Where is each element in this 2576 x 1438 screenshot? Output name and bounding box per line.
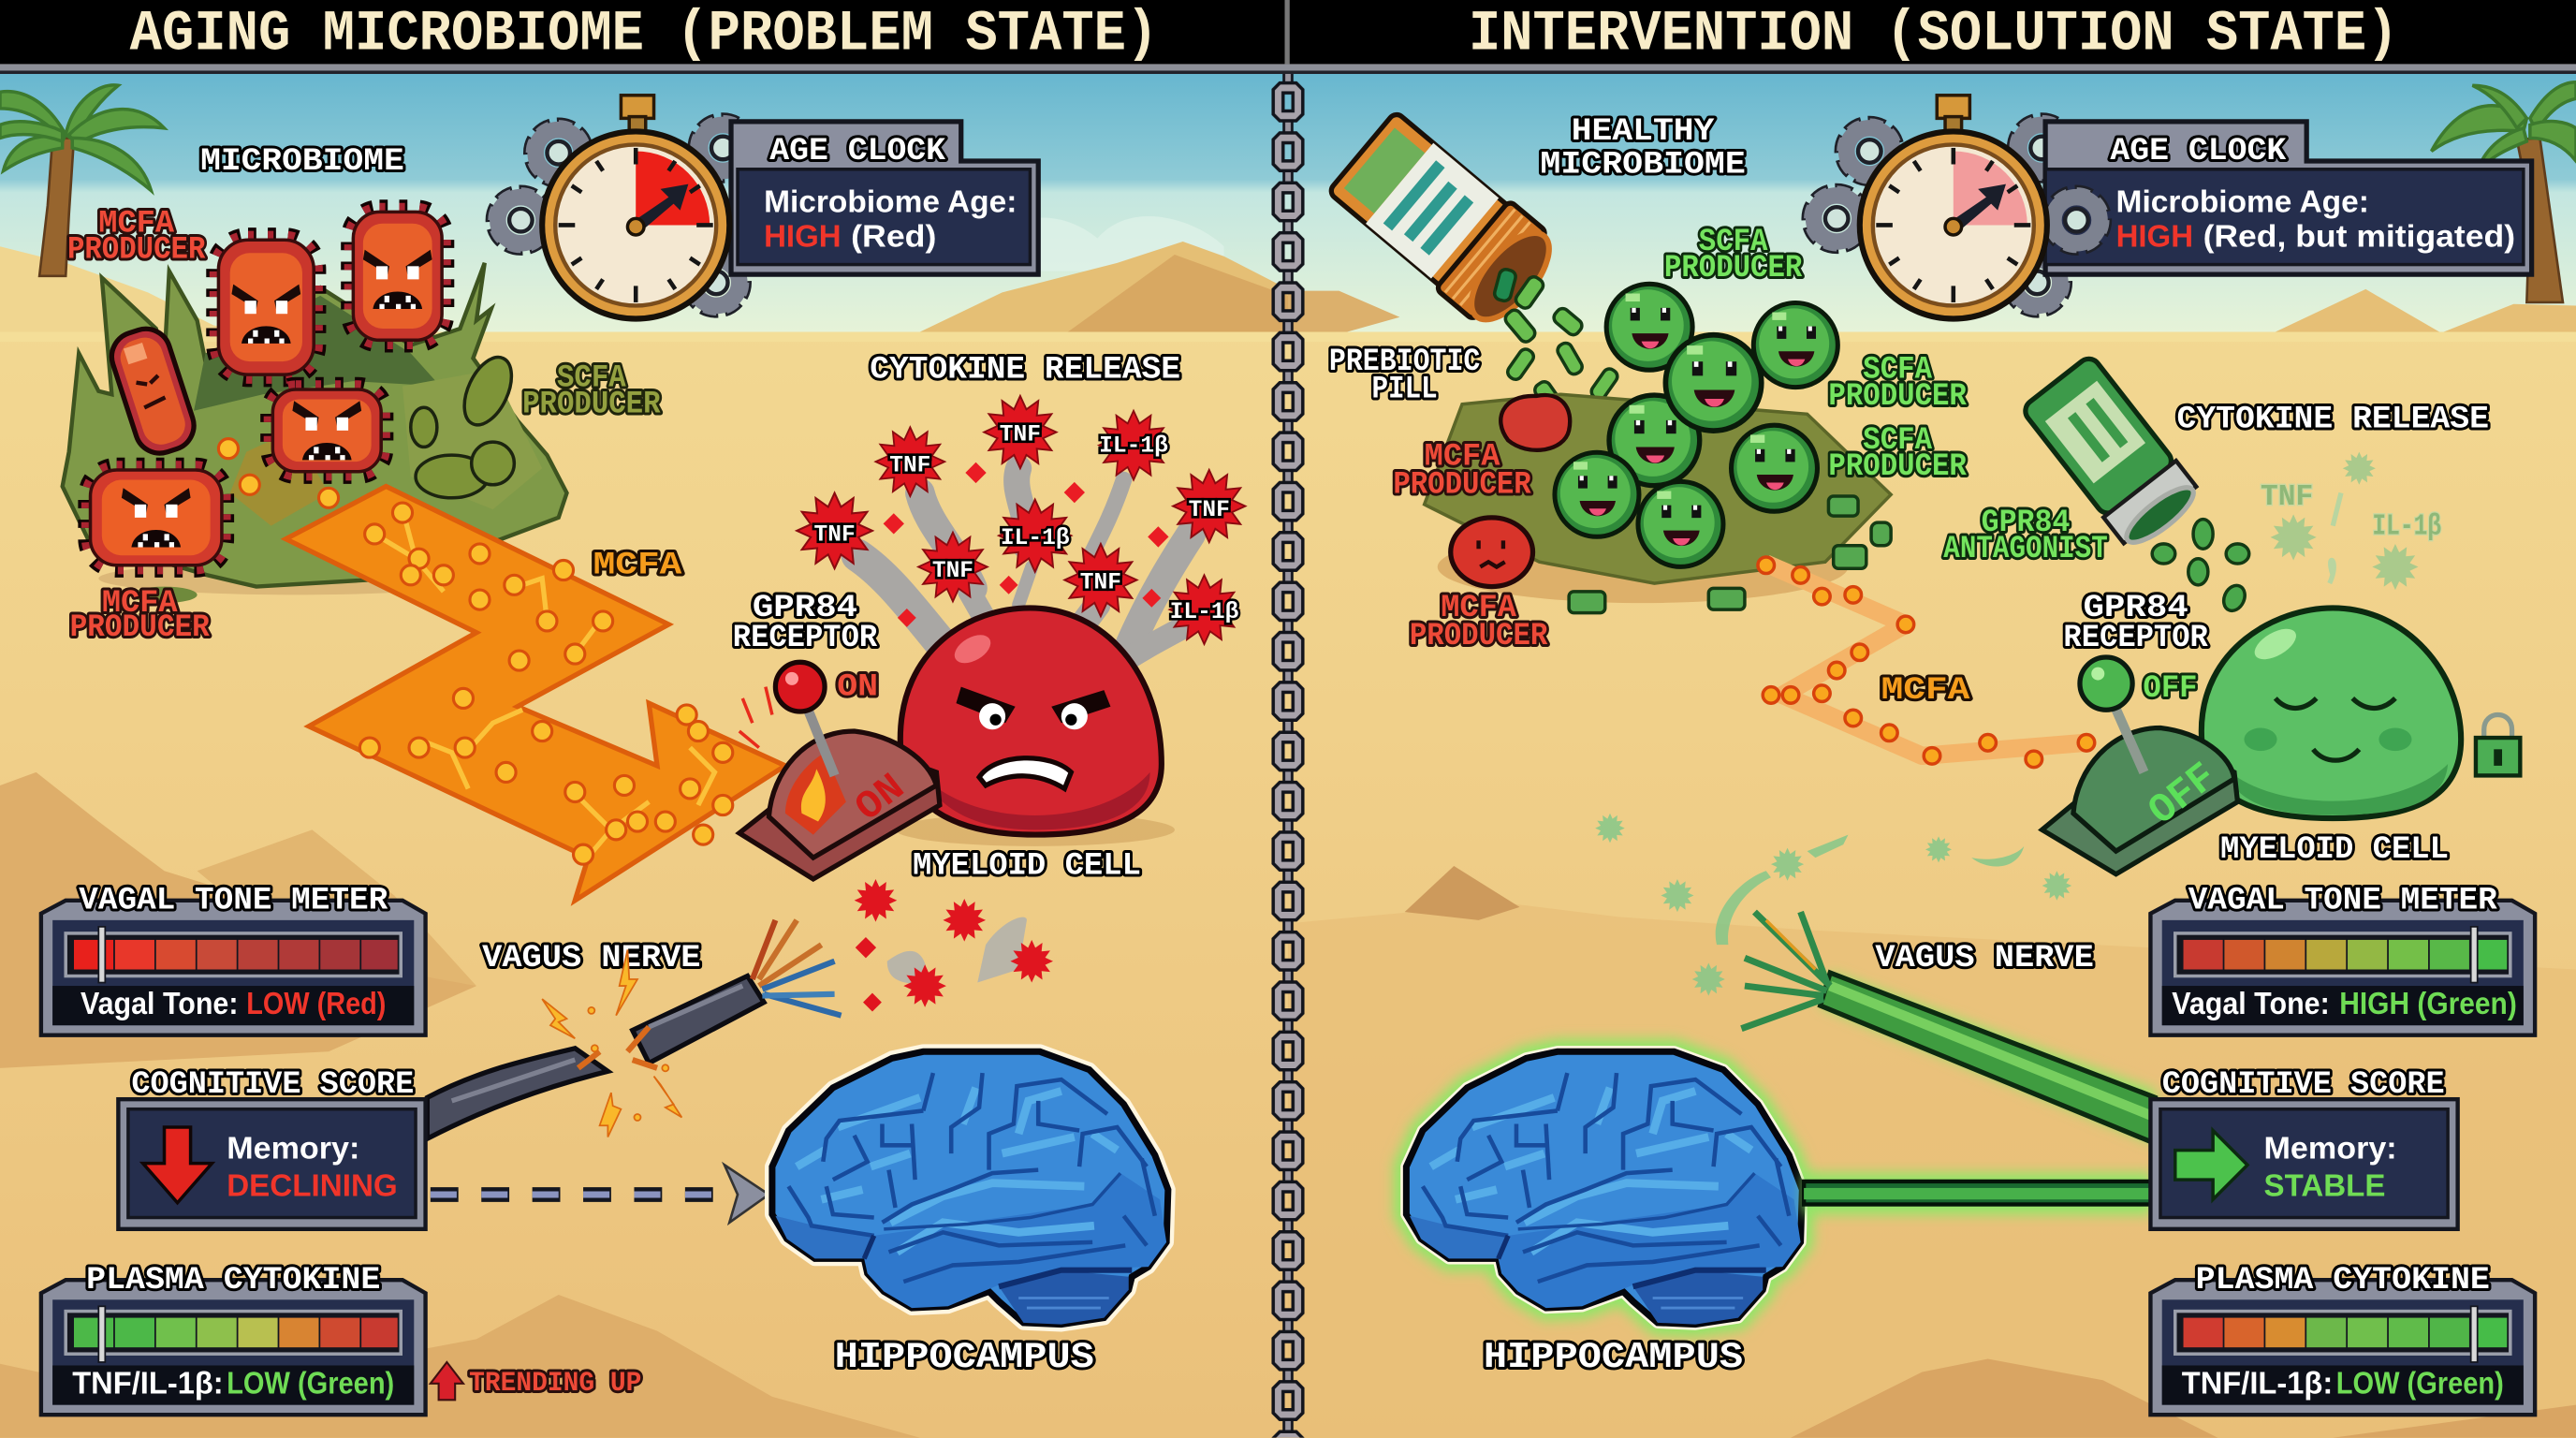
age clock left bbox=[494, 95, 1038, 318]
label: mcfa producer a bbox=[1393, 440, 1531, 504]
cytokine labels: TNF bbox=[889, 454, 930, 479]
panel: plasma cytokine left: PLASMA CYTOKINE bbox=[86, 1263, 380, 1299]
faded cytokines: TNF bbox=[2261, 481, 2313, 514]
label: scfa producer b bbox=[1828, 353, 1967, 415]
panel: age clock readout: Microbiome Age: bbox=[2116, 184, 2369, 219]
healthy connection to hippocampus bbox=[1804, 1173, 2152, 1214]
antagonist pills bbox=[2152, 520, 2249, 614]
panel: vagal tone meter left bbox=[41, 884, 426, 1035]
myeloid cell angry bbox=[896, 608, 1175, 846]
label: healthy microbiome: HEALTHY bbox=[1572, 114, 1715, 150]
trending up indicator bbox=[431, 1362, 641, 1400]
faded green particles bbox=[1595, 814, 2071, 996]
panel: vagal tone meter left: VAGAL TONE METER bbox=[79, 884, 388, 919]
panel: plasma cytokine right: LOW (Green) bbox=[2336, 1366, 2504, 1401]
red mcfa microbes reduced bbox=[1451, 395, 1570, 587]
healthy vagus nerve bbox=[1741, 912, 2156, 1144]
cytokine labels: IL-1β bbox=[1099, 434, 1168, 460]
label: scfa producer c: PRODUCER bbox=[1828, 449, 1967, 485]
label: off: OFF bbox=[2144, 671, 2197, 707]
switch: off lever bbox=[2042, 657, 2237, 874]
panel: plasma cytokine right bbox=[2150, 1263, 2535, 1415]
panel: plasma cytokine right: PLASMA CYTOKINE bbox=[2196, 1263, 2490, 1299]
label: on: ON bbox=[837, 669, 878, 705]
panel: cognitive score right bbox=[2150, 1067, 2458, 1229]
label: cytokine release right: CYTOKINE RELEASE bbox=[2177, 402, 2489, 437]
trending up indicator: TRENDING UP bbox=[469, 1367, 641, 1399]
cytokine labels: TNF bbox=[1080, 570, 1121, 595]
label: scfa producer b: SCFA bbox=[1863, 353, 1932, 389]
panel: age clock readout: (Red) bbox=[851, 219, 936, 254]
panel: vagal tone meter right: HIGH (Green) bbox=[2339, 987, 2517, 1021]
cytokine labels: IL-1β bbox=[1170, 600, 1239, 625]
label: mcfa producer b: MCFA bbox=[1441, 591, 1516, 626]
switch: on lever: ON bbox=[847, 765, 914, 831]
small red particles bbox=[884, 462, 1169, 627]
reduced mcfa trail bbox=[1758, 557, 2095, 768]
panel: cognitive score left: Memory: bbox=[227, 1131, 359, 1166]
panel: plasma cytokine right: TNF/IL-1β: bbox=[2182, 1366, 2333, 1401]
label: gpr84 antagonist: ANTAGONIST bbox=[1943, 532, 2108, 567]
panel: age clock readout bbox=[2045, 122, 2532, 274]
cytokine bursts bbox=[797, 396, 1245, 644]
label: scfa producer a bbox=[1664, 225, 1803, 286]
panel: vagal tone meter left: LOW (Red) bbox=[246, 987, 386, 1021]
label: scfa producer: SCFA bbox=[557, 360, 626, 396]
age clock right bbox=[1810, 95, 2532, 318]
label: prebiotic pill: PILL bbox=[1372, 373, 1438, 408]
title: solution state: INTERVENTION (SOLUTION STATE) bbox=[1469, 3, 2398, 67]
label: healthy microbiome: MICROBIOME bbox=[1540, 147, 1746, 183]
faded cytokines bbox=[2261, 452, 2441, 590]
chain divider bbox=[1271, 74, 1305, 1438]
title: problem state: AGING MICROBIOME (PROBLEM STATE) bbox=[130, 3, 1158, 67]
faded cytokines: IL-1β bbox=[2372, 510, 2441, 543]
icon: green right arrow bbox=[2175, 1131, 2247, 1199]
label: hippocampus left: HIPPOCAMPUS bbox=[835, 1337, 1094, 1378]
panel: vagal tone meter right: VAGAL TONE METER bbox=[2188, 884, 2497, 919]
icon: gears bbox=[494, 122, 749, 309]
panel: age clock readout: HIGH bbox=[2116, 219, 2193, 254]
panel: cognitive score right: STABLE bbox=[2264, 1169, 2385, 1204]
switch: off lever: OFF bbox=[2140, 755, 2226, 836]
severed vagus nerve bbox=[427, 920, 842, 1138]
cytokine labels: TNF bbox=[813, 522, 856, 548]
label: mcfa producer top bbox=[67, 206, 206, 269]
icon: stopwatch clock bbox=[1860, 95, 2047, 318]
label: mcfa producer b bbox=[1410, 591, 1548, 654]
icon: lock bbox=[2476, 714, 2520, 775]
label: hippocampus right: HIPPOCAMPUS bbox=[1484, 1337, 1743, 1378]
label: scfa producer bbox=[522, 360, 661, 423]
healthy biofilm mound bbox=[1425, 394, 1891, 613]
label: mcfa producer a: PRODUCER bbox=[1393, 468, 1531, 504]
label: gpr84 receptor bbox=[733, 591, 878, 656]
panel: intervention solution state bbox=[1325, 82, 2576, 1415]
label: scfa producer c bbox=[1828, 423, 1967, 485]
label: gpr84 receptor right: GPR84 bbox=[2083, 591, 2188, 626]
icon: gpr84 antagonist bottle bbox=[2020, 353, 2204, 553]
meter segments bbox=[74, 940, 398, 970]
label: scfa producer: PRODUCER bbox=[522, 388, 661, 423]
switch: on lever bbox=[739, 662, 940, 879]
panel: plasma cytokine left: LOW (Green) bbox=[227, 1366, 394, 1401]
sparks bbox=[542, 949, 681, 1137]
microbiome biofilm mound bbox=[63, 263, 567, 603]
panel: vagal tone meter right: Vagal Tone: bbox=[2172, 987, 2330, 1021]
arrow: dashed signal to hippocampus bbox=[431, 1165, 768, 1223]
label: scfa producer a: SCFA bbox=[1699, 225, 1768, 260]
icon: gears bbox=[1810, 122, 2069, 309]
icon: palm tree left bbox=[0, 85, 165, 276]
label: vagus nerve right: VAGUS NERVE bbox=[1875, 941, 2094, 976]
label: mcfa producer bottom: PRODUCER bbox=[70, 610, 210, 646]
panel: cognitive score right: Memory: bbox=[2264, 1131, 2397, 1166]
panel: cognitive score right: COGNITIVE SCORE bbox=[2162, 1067, 2445, 1103]
brain right hippocampus bbox=[1406, 1051, 1802, 1325]
label: gpr84 antagonist bbox=[1943, 506, 2108, 567]
scfa olive microbes bbox=[411, 350, 521, 498]
brain left hippocampus bbox=[772, 1051, 1168, 1325]
icon: palm tree right bbox=[2432, 82, 2576, 302]
cytokine labels: IL-1β bbox=[1001, 526, 1070, 551]
cytokine labels: TNF bbox=[1000, 422, 1041, 448]
label: myeloid cell: MYELOID CELL bbox=[913, 849, 1141, 885]
label: gpr84 antagonist: GPR84 bbox=[1982, 506, 2070, 541]
header bar bbox=[0, 0, 2576, 74]
panel: cognitive score left: COGNITIVE SCORE bbox=[131, 1067, 414, 1103]
label: mcfa right: MCFA bbox=[1881, 673, 1970, 709]
panel: age clock readout: AGE CLOCK bbox=[769, 134, 946, 169]
label: scfa producer a: PRODUCER bbox=[1664, 251, 1803, 286]
label: scfa producer c: SCFA bbox=[1863, 423, 1932, 459]
meter segments bbox=[2184, 1318, 2507, 1347]
cytokine labels bbox=[813, 422, 1239, 625]
label: mcfa producer top: PRODUCER bbox=[67, 233, 206, 269]
panel: age clock readout: (Red, but mitigated) bbox=[2203, 219, 2515, 254]
pills spilling bbox=[1493, 268, 1620, 452]
icon: red down arrow bbox=[143, 1127, 212, 1203]
label: prebiotic pill: PREBIOTIC bbox=[1329, 345, 1480, 380]
red mcfa producer bacteria bbox=[91, 212, 442, 565]
icon: prebiotic pill bottle bbox=[1325, 108, 1566, 336]
panel: age clock readout: AGE CLOCK bbox=[2110, 134, 2287, 169]
green scfa producers bbox=[1555, 284, 1837, 566]
label: mcfa producer bottom: MCFA bbox=[102, 586, 178, 622]
panel: age clock readout: HIGH bbox=[764, 219, 842, 254]
cytokine labels: TNF bbox=[1189, 498, 1230, 523]
label: gpr84 receptor: GPR84 bbox=[753, 591, 857, 626]
panel: plasma cytokine left bbox=[41, 1263, 426, 1415]
smoke plumes bbox=[857, 468, 1191, 670]
label: myeloid cell right: MYELOID CELL bbox=[2220, 832, 2449, 868]
label: cytokine release: CYTOKINE RELEASE bbox=[870, 353, 1180, 389]
panel: age clock readout: Microbiome Age: bbox=[764, 184, 1017, 219]
cytokine burst cluster bbox=[797, 396, 1245, 670]
icon: stopwatch clock bbox=[542, 95, 729, 318]
label: mcfa producer a: MCFA bbox=[1425, 440, 1500, 476]
label: microbiome: MICROBIOME bbox=[200, 144, 404, 180]
label: scfa producer b: PRODUCER bbox=[1828, 379, 1967, 415]
label: mcfa producer bottom bbox=[70, 586, 210, 646]
label: gpr84 receptor: RECEPTOR bbox=[733, 621, 878, 656]
cytokine labels: TNF bbox=[932, 559, 973, 584]
panel: aging microbiome problem state bbox=[0, 85, 1245, 1415]
label: healthy microbiome bbox=[1540, 114, 1746, 183]
myeloid cell calm bbox=[2202, 608, 2461, 818]
meter segments bbox=[74, 1318, 398, 1347]
panel: cognitive score left: DECLINING bbox=[227, 1169, 398, 1204]
released cytokines near nerve bbox=[855, 879, 1053, 1012]
label: prebiotic pill bbox=[1329, 345, 1480, 408]
arrow: mcfa zigzag bbox=[218, 439, 785, 901]
meter segments bbox=[2184, 940, 2507, 970]
panel: vagal tone meter right bbox=[2150, 884, 2535, 1035]
label: vagus nerve left: VAGUS NERVE bbox=[482, 941, 701, 976]
panel: vagal tone meter left: Vagal Tone: bbox=[80, 987, 238, 1021]
panel: cognitive score left bbox=[118, 1067, 426, 1229]
panel: plasma cytokine left: TNF/IL-1β: bbox=[72, 1366, 224, 1401]
label: mcfa producer top: MCFA bbox=[98, 206, 174, 242]
panel: age clock readout bbox=[731, 122, 1038, 274]
label: gpr84 receptor right bbox=[2063, 591, 2208, 656]
label: mcfa producer b: PRODUCER bbox=[1410, 619, 1548, 654]
label: mcfa: MCFA bbox=[593, 549, 682, 584]
label: gpr84 receptor right: RECEPTOR bbox=[2063, 621, 2208, 656]
